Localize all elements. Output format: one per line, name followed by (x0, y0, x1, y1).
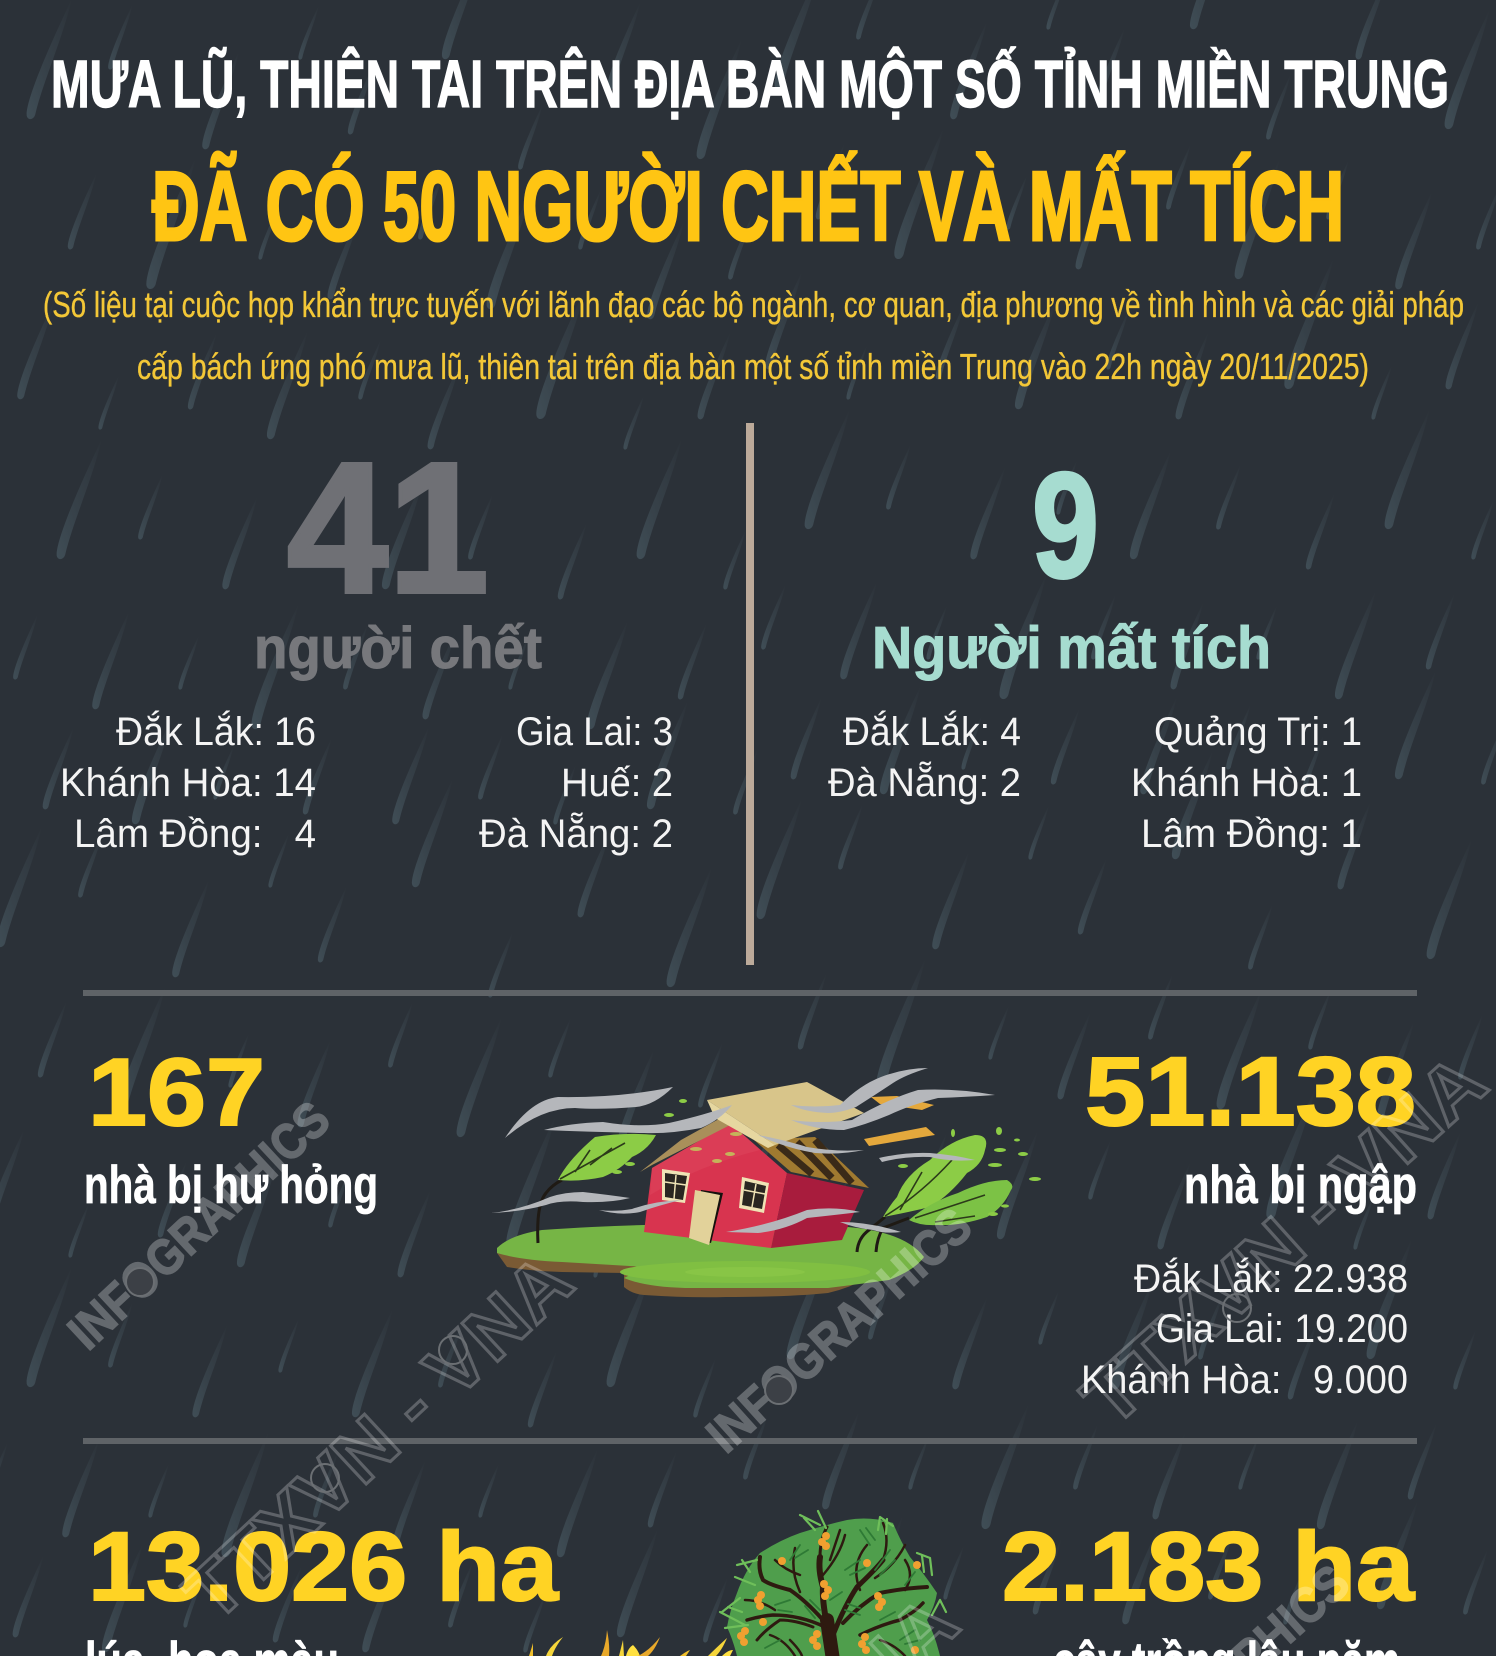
missing right column (1131, 710, 1362, 856)
flooded list: Khánh Hòa: 9.000 (1081, 1358, 1408, 1402)
watermark: INFOGRAPHICS left: INFOGRAPHICS (57, 1091, 341, 1360)
deaths right column: Đà Nẵng: 2 (479, 811, 673, 856)
deaths left column: Lâm Đồng: 4 (74, 812, 316, 856)
icon: fruit tree (720, 1511, 946, 1656)
watermark: INFOGRAPHICS centre: INFOGRAPHICS (696, 1197, 982, 1463)
ground (497, 1225, 924, 1297)
label damaged houses: nhà bị hư hỏng (84, 1156, 378, 1215)
house roof (640, 1082, 869, 1188)
deaths left column: Khánh Hòa: 14 (60, 761, 316, 805)
windows and door (662, 1169, 769, 1245)
number 167: 167 (88, 1039, 265, 1146)
tree fruit (737, 1532, 921, 1654)
flooded list (1081, 1256, 1408, 1402)
number 2.183 ha: 2.183 ha (1002, 1512, 1415, 1621)
deaths left column: Đắk Lắk: 16 (116, 709, 316, 754)
flying planks (864, 1096, 935, 1146)
flying leaves (612, 1099, 1041, 1216)
panel: damaged houses (84, 1039, 378, 1215)
missing left column: Đắk Lắk: 4 (843, 709, 1021, 754)
missing left column: Đà Nẵng: 2 (828, 760, 1021, 805)
missing right column: Lâm Đồng: 1 (1141, 812, 1362, 856)
watermark: TTXVN VNA left: TTXVN - VNA (169, 1238, 589, 1637)
panel: rice and crops (85, 1512, 559, 1656)
tree leaves (720, 1511, 946, 1648)
panel: flooded houses (1081, 1037, 1417, 1402)
label missing: Người mất tích (872, 615, 1271, 681)
label flooded houses: nhà bị ngập (1184, 1156, 1417, 1215)
panel: missing (828, 441, 1362, 856)
left tree (538, 1134, 656, 1243)
right trees (857, 1135, 1012, 1252)
deaths right column (479, 710, 673, 856)
flooded list: Đắk Lắk: 22.938 (1134, 1256, 1408, 1301)
label deaths: người chết (254, 616, 542, 681)
deaths right column: Huế: 2 (561, 761, 673, 805)
deaths left column (60, 709, 316, 856)
deaths right column: Gia Lai: 3 (516, 710, 673, 754)
number 51.138: 51.138 (1085, 1037, 1416, 1146)
house walls (644, 1123, 864, 1248)
missing right column: Quảng Trị: 1 (1154, 710, 1362, 754)
icon: rice field (529, 1630, 733, 1656)
number 13.026 ha: 13.026 ha (88, 1512, 559, 1621)
tree crown (727, 1519, 940, 1656)
panel: perennial crops (1002, 1512, 1415, 1656)
flooded list: Gia Lai: 19.200 (1156, 1307, 1408, 1351)
header (43, 46, 1464, 387)
number 9: 9 (1032, 441, 1099, 609)
panel: deaths (60, 425, 673, 856)
wind streaks (491, 1068, 995, 1233)
icon: house in storm (491, 1068, 1041, 1297)
number 41: 41 (287, 425, 489, 632)
watermark: TTXVN VNA right: TTXVN - VNA (1066, 1038, 1496, 1443)
missing right column: Khánh Hòa: 1 (1131, 761, 1362, 805)
missing left column (828, 709, 1021, 805)
tree branches (745, 1523, 927, 1656)
